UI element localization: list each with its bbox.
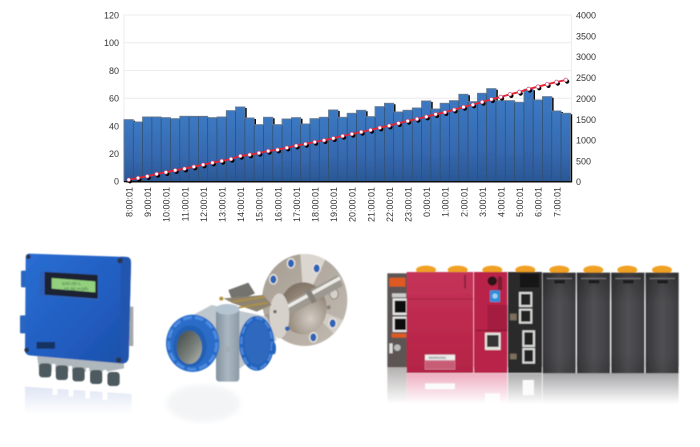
flange plate: [262, 254, 348, 346]
time axis labels: 19:00:01: [329, 187, 339, 222]
right axis labels: 1000: [576, 136, 596, 146]
right axis labels: 2000: [576, 94, 596, 104]
time axis labels: 17:00:01: [292, 187, 302, 222]
display panel: [39, 271, 99, 301]
right axis labels: 1500: [576, 115, 596, 125]
time axis labels: 4:00:01: [496, 187, 506, 217]
right axis labels: [576, 10, 596, 187]
logo badge: [37, 342, 55, 349]
orange latches: [416, 266, 672, 274]
time axis labels: 18:00:01: [310, 187, 320, 222]
time axis labels: 11:00:01: [180, 187, 190, 221]
time axis labels: 16:00:01: [273, 187, 283, 222]
product: blue wall-mount flow meter: [20, 254, 133, 414]
product: modular PLC rack: [387, 266, 680, 411]
time axis labels: 13:00:01: [218, 187, 228, 222]
time axis labels: 22:00:01: [385, 187, 395, 222]
time axis labels: 21:00:01: [366, 187, 376, 222]
flow meter reflection: [25, 382, 132, 414]
enclosure body: [25, 254, 131, 363]
chart: hourly bars with cumulative line: [104, 10, 596, 222]
time axis labels: 15:00:01: [255, 187, 265, 222]
rack reflection: [387, 367, 680, 411]
time axis labels: 6:00:01: [534, 187, 544, 217]
large red module: WARNING: [429, 356, 446, 360]
time axis labels: 8:00:01: [124, 187, 134, 217]
transmitter reflection: [167, 385, 240, 422]
right blue cap: [239, 316, 276, 371]
time axis labels: 23:00:01: [404, 187, 414, 222]
right axis labels: 3500: [576, 32, 596, 42]
right axis labels: 4000: [576, 10, 596, 20]
time axis labels: 12:00:01: [199, 187, 209, 222]
network module: [508, 272, 542, 373]
time axis labels: 7:00:01: [552, 187, 562, 217]
left axis labels: 100: [104, 38, 119, 48]
left axis labels: 40: [109, 122, 119, 132]
left axis labels: 20: [109, 149, 119, 159]
power module: [387, 273, 407, 367]
time axis labels: 0:00:01: [422, 187, 432, 217]
I/O modules: [543, 273, 679, 373]
time axis labels: 9:00:01: [143, 187, 153, 217]
centre cylinder: [215, 304, 239, 382]
display panel: 15.00 m3/h: [63, 287, 88, 293]
time axis labels: 14:00:01: [236, 187, 246, 222]
time axis labels: 10:00:01: [162, 187, 172, 222]
product: flanged differential pressure transmitter: [166, 250, 350, 422]
CPU red module: [474, 272, 507, 373]
time axis labels: 5:00:01: [515, 187, 525, 217]
time axis labels: 20:00:01: [348, 187, 358, 222]
left axis labels: 60: [109, 94, 119, 104]
left axis labels: 80: [109, 66, 119, 76]
left axis labels: [104, 10, 119, 186]
left axis labels: 0: [114, 176, 119, 186]
time axis labels: 2:00:01: [459, 187, 469, 217]
time axis labels: 1:00:01: [441, 187, 451, 217]
right axis labels: 3000: [576, 52, 596, 62]
cumulative line series with markers: [129, 80, 567, 181]
time axis labels: 3:00:01: [478, 187, 488, 217]
small flange: [269, 293, 290, 339]
cable glands: [37, 353, 124, 387]
display panel: 100.00 L: [62, 281, 81, 287]
manifold: [219, 283, 272, 312]
right axis labels: 0: [576, 177, 581, 187]
bar series: [124, 89, 572, 182]
large red module: [407, 272, 473, 373]
grid lines: [124, 15, 572, 181]
impulse pipe: [283, 281, 340, 312]
right axis labels: 2500: [576, 73, 596, 83]
enclosure screws: [24, 254, 123, 363]
time axis labels: [124, 187, 562, 222]
transmitter housing: [187, 305, 277, 368]
right axis labels: 500: [576, 156, 591, 166]
left axis labels: 120: [104, 10, 119, 20]
side tabs and hinge: [20, 271, 133, 346]
left blue cap with sight glass: [166, 315, 219, 372]
